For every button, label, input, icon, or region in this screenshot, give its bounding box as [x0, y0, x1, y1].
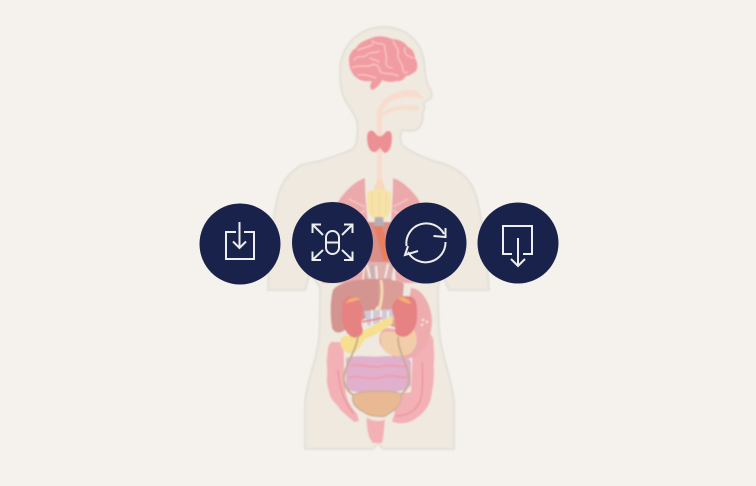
kidneys: [342, 296, 417, 338]
human body illustration: [268, 27, 489, 449]
icon button: export: [478, 202, 558, 284]
icon: two circular arrows: [405, 223, 446, 262]
bladder: [353, 391, 401, 416]
thyroid: [367, 130, 392, 153]
icon button: import: [200, 204, 280, 284]
lungs: [322, 178, 436, 283]
airway: nasal cavity, mouth and trachea: [377, 90, 423, 183]
pancreas: [340, 316, 393, 353]
ureters: [344, 336, 409, 396]
body silhouette: [268, 27, 489, 449]
icon: arrow into box: [226, 222, 254, 259]
stomach and spleen: [378, 279, 432, 358]
liver: [331, 279, 378, 333]
large intestine: [327, 332, 434, 423]
icon button: cycle: [386, 202, 466, 284]
abdominal vessels: [362, 309, 394, 326]
esophagus connector and thymus: [367, 180, 391, 221]
brain: [349, 36, 417, 90]
small intestine: [346, 356, 411, 392]
heart and great vessels: [364, 217, 394, 282]
bile duct: [379, 280, 382, 310]
icon button: dispersing pill: [292, 202, 373, 283]
icon: capsule with four outward arrows: [312, 224, 352, 260]
rectum: [367, 417, 385, 443]
icon: arrow out of box: [503, 226, 532, 266]
